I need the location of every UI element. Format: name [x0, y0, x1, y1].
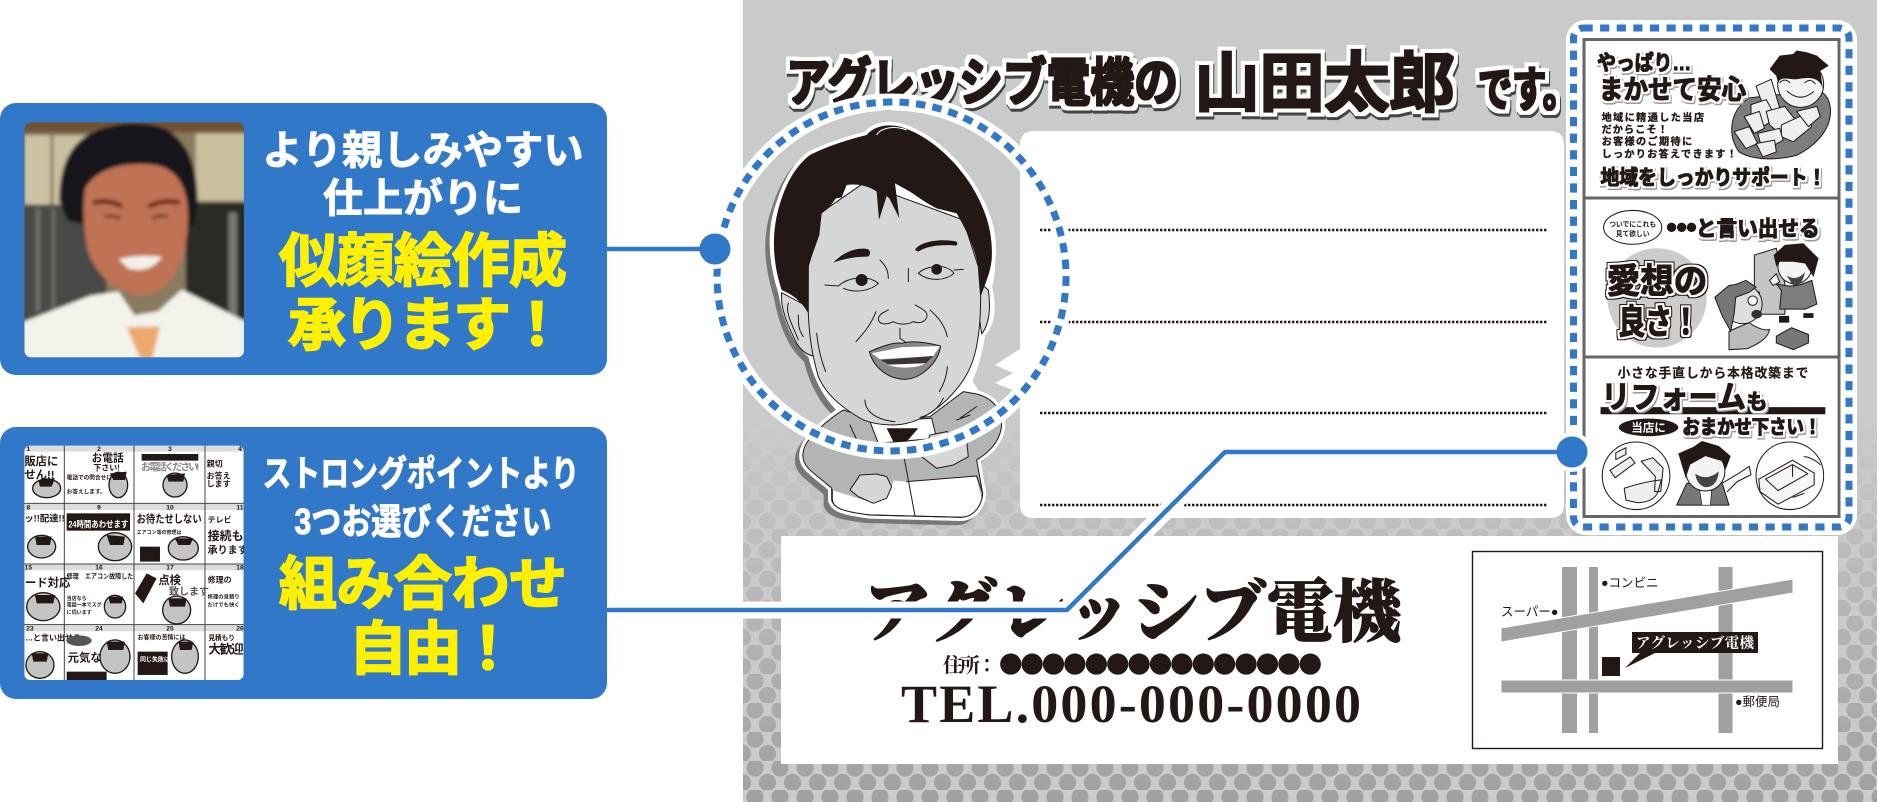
- icon: toilet: [1602, 442, 1670, 510]
- strong point: renovation: 小さな手直しから本格改築まで: [1617, 366, 1808, 381]
- thumbnail sheet of strong points: お答えします。: [67, 487, 106, 495]
- strong point: peace of mind: しっかりお答えできます！: [1602, 148, 1737, 161]
- heading: free combination: 自由！: [349, 617, 514, 682]
- thumbnail sheet of strong points: 16: [95, 565, 103, 572]
- location map: [1472, 552, 1822, 748]
- thumbnail sheet of strong points: 修理の見積り: [208, 592, 240, 600]
- phone number: TEL.000-000-0000: [901, 674, 1361, 734]
- thumbnail sheet of strong points: 電話一本でスグ: [67, 602, 102, 609]
- location map: スーパー●: [1501, 605, 1558, 619]
- thumbnail sheet of strong points: 3: [168, 446, 172, 453]
- icon: repairman and customer: [1715, 243, 1819, 350]
- thumbnail sheet of strong points: エアコン等の修理は: [137, 529, 182, 536]
- thumbnail sheet of strong points: 修理の: [208, 575, 232, 585]
- connector: strong points callout to column: [607, 432, 1592, 610]
- address: ●●●●●●●●●●●●●●●: [999, 646, 1322, 680]
- panel: portrait offer: [0, 103, 607, 375]
- strong point: friendliness: 見て欲しい: [1616, 229, 1650, 238]
- panel: strong points column: [1566, 20, 1857, 535]
- thumbnail sheet of strong points: 23: [26, 626, 34, 633]
- strong point: peace of mind: [1597, 51, 1831, 189]
- heading: friendlier finish: より親しみやすい: [262, 129, 584, 173]
- icon: smiling man holding boxes: [1732, 51, 1831, 159]
- thumbnail sheet of strong points: 点検: [158, 573, 182, 587]
- thumbnail sheet of strong points: …と言い出せる: [25, 633, 81, 643]
- thumbnail sheet of strong points: 11: [236, 504, 244, 511]
- thumbnail sheet of strong points: 10: [166, 504, 174, 511]
- thumbnail sheet of strong points: 元気な: [68, 651, 102, 665]
- thumbnail sheet of strong points: 15: [25, 565, 32, 572]
- thumbnail sheet of strong points: 見積もり: [208, 633, 235, 642]
- heading: free combination: [262, 453, 580, 682]
- strong point: renovation: リフォーム: [1601, 380, 1746, 415]
- location map: ●コンビニ: [1601, 576, 1659, 590]
- title: [786, 46, 1577, 120]
- thumbnail sheet of strong points: [24, 446, 251, 681]
- heading: friendlier finish: 仕上がりに: [323, 177, 523, 221]
- thumbnail sheet of strong points: 4: [238, 446, 242, 453]
- heading: free combination: 組み合わせ: [279, 552, 567, 617]
- panel: sample business card background: [743, 0, 1877, 802]
- strong point: renovation: おまかせ下さい！: [1682, 417, 1821, 439]
- icon: cheerful man waving: [1677, 441, 1751, 505]
- heading: friendlier finish: 似顔絵作成: [279, 229, 567, 294]
- thumbnail sheet of strong points: 電話での問合せにも: [67, 473, 118, 481]
- strong point: peace of mind: だからこそ！: [1602, 124, 1668, 136]
- address: 住所：: [943, 654, 997, 677]
- thumbnail sheet of strong points: 同じ失敗は: [140, 656, 170, 664]
- title: 山田太郎: [1194, 46, 1455, 120]
- thumbnail sheet of strong points: 下さい!: [93, 464, 120, 473]
- thumbnail sheet of strong points: 1: [26, 446, 30, 453]
- thumbnail sheet of strong points: お客様の苦情には: [138, 633, 186, 641]
- thumbnail sheet of strong points: 18: [236, 565, 244, 572]
- title: アグレッシブ電機の: [786, 55, 1178, 113]
- heading: free combination: ストロングポイントより: [262, 453, 580, 494]
- connector: portrait callout to caricature: [607, 229, 735, 269]
- thumbnail sheet of strong points: 2: [97, 446, 101, 453]
- strong point: peace of mind: お客様のご期待に: [1602, 135, 1692, 148]
- thumbnail sheet of strong points: します: [207, 480, 231, 489]
- thumbnail sheet of strong points: ッ!!配達!!: [24, 513, 65, 524]
- thumbnail sheet of strong points: お電話ください!: [141, 461, 199, 474]
- strong point: friendliness: [1604, 210, 1820, 350]
- thumbnail sheet of strong points: 親切: [207, 459, 223, 469]
- strong point: peace of mind: 地域に精通した当店: [1602, 111, 1704, 124]
- thumbnail sheet of strong points: ード対応: [25, 576, 71, 590]
- icon: bathtub: [1756, 442, 1824, 510]
- strong point: peace of mind: やっぱり…: [1597, 52, 1691, 75]
- shop name: アグレッシブ電機: [864, 575, 1406, 651]
- thumbnail sheet of strong points: テレビ: [208, 515, 232, 525]
- thumbnail sheet of strong points: 24時間あわせます: [68, 519, 128, 530]
- thumbnail sheet of strong points: せん!!: [24, 468, 55, 481]
- heading: friendlier finish: 承ります！: [288, 293, 563, 358]
- strong point: friendliness: 良さ！: [1618, 304, 1699, 342]
- strong point: friendliness: ついでにこれも: [1609, 220, 1656, 228]
- panel: strong points offer: [0, 427, 607, 699]
- thumbnail sheet of strong points: 8: [26, 504, 30, 511]
- location map: ●郵便局: [1735, 695, 1780, 709]
- thumbnail sheet of strong points: 9: [97, 504, 101, 511]
- thumbnail sheet of strong points: 大歓迎: [208, 641, 244, 656]
- panel: shop contact card: [781, 536, 1838, 764]
- title: です。: [1478, 64, 1577, 117]
- thumbnail sheet of strong points: 17: [166, 565, 174, 572]
- strong point: peace of mind: まかせて安心: [1599, 75, 1746, 105]
- thumbnail sheet of strong points: お電話: [92, 452, 124, 465]
- thumbnail sheet of strong points: お答え: [207, 470, 231, 480]
- location map: アグレッシブ電機: [1636, 634, 1756, 652]
- thumbnail sheet of strong points: 25: [166, 626, 174, 633]
- strong point: friendliness: と言い出せる: [1696, 216, 1820, 241]
- strong point: renovation: 当店に: [1631, 420, 1666, 434]
- thumbnail sheet of strong points: だけでも快く: [208, 601, 240, 609]
- thumbnail sheet of strong points: 24: [95, 626, 103, 633]
- thumbnail sheet of strong points: 当店なら: [67, 595, 87, 602]
- photo of man: [20, 118, 249, 363]
- strong point: renovation: [1601, 366, 1825, 510]
- thumbnail sheet of strong points: 接続も: [208, 528, 244, 543]
- thumbnail sheet of strong points: 致します: [169, 586, 209, 598]
- strong point: friendliness: 愛想の: [1607, 263, 1707, 301]
- strong point: peace of mind: 地域をしっかりサポート！: [1601, 166, 1826, 189]
- panel: message box with ruled lines: [995, 131, 1564, 518]
- small cartoon figures: [26, 472, 198, 678]
- thumbnail sheet of strong points: 承ります!: [208, 544, 251, 556]
- heading: free combination: 3つお選びください: [294, 501, 552, 542]
- strong point: renovation: も: [1747, 391, 1768, 414]
- thumbnail sheet of strong points: 販店に: [24, 455, 58, 468]
- thumbnail sheet of strong points: 26: [236, 626, 244, 633]
- heading: friendlier finish: [262, 129, 584, 358]
- thumbnail sheet of strong points: 修理 エアコン故障した: [67, 571, 134, 580]
- thumbnail sheet of strong points: お待たせしない: [137, 512, 202, 526]
- illustration: caricature of man: [769, 125, 1002, 522]
- dashed circle highlight around caricature: [717, 102, 1066, 451]
- thumbnail sheet of strong points: に伺います: [67, 609, 92, 616]
